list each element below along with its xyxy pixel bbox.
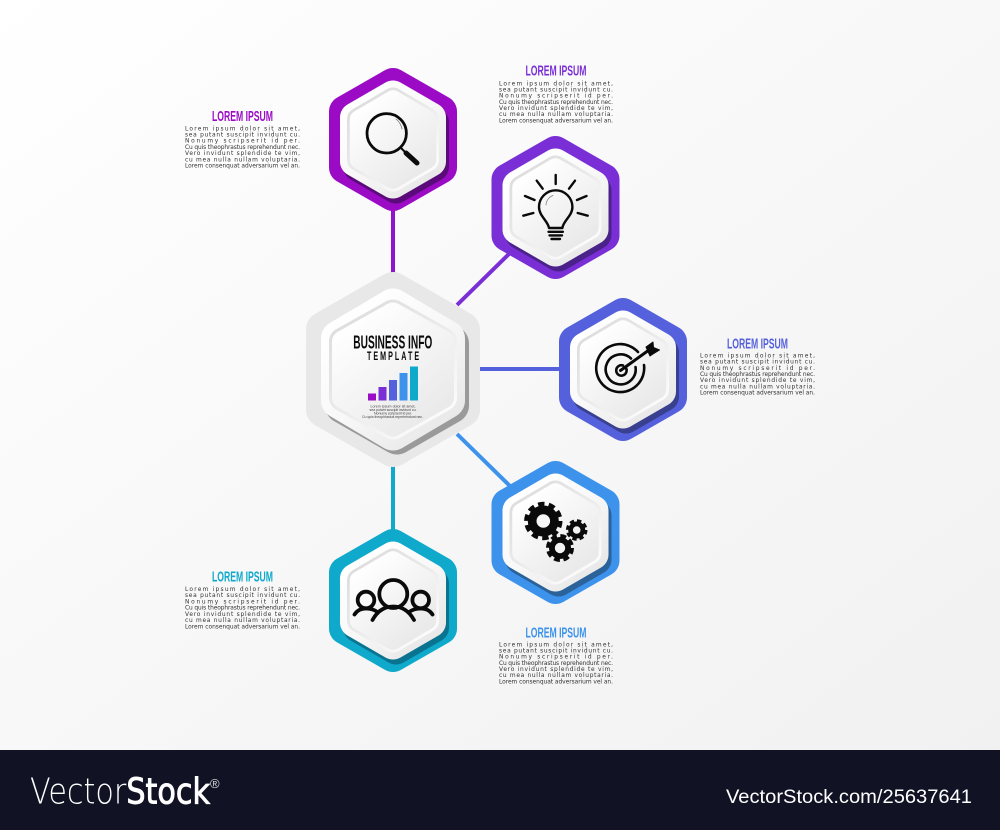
text block: search (185, 108, 300, 170)
text block: target: Nonumy scripserit id per. (700, 366, 815, 372)
icon: magnifying glass (367, 114, 417, 163)
text block: team (185, 569, 300, 630)
central caption (362, 405, 423, 419)
text block: gears: Nonumy scripserit id per. (499, 655, 613, 661)
text block: target (700, 335, 815, 397)
text block: idea: sea putant suscipit invidunt cu. (499, 88, 613, 94)
text block: idea: Vero invidunt splendide te vim, (499, 106, 613, 112)
connector: gears (457, 434, 512, 488)
panel: team hexagon (345, 545, 441, 656)
text block: gears: Lorem ipsum dolor sit amet, (499, 642, 613, 648)
text block: target: sea putant suscipit invidunt cu. (700, 360, 815, 366)
text block: gears: LOREM IPSUM (526, 624, 586, 641)
text block: search: LOREM IPSUM (212, 108, 273, 125)
text block: target: cu mea nulla nullam voluptaria. (700, 384, 815, 390)
panel: central hexagon (324, 290, 462, 449)
text block: team: sea putant suscipit invidunt cu. (185, 593, 300, 599)
text block: search: sea putant suscipit invidunt cu. (185, 132, 300, 138)
text block: target: Cu quis theophrastus reprehendunt nec. (700, 372, 815, 378)
footer logo: VectorStock (30, 772, 210, 813)
icon: target with arrow (596, 342, 660, 392)
connector: search (391, 205, 395, 275)
text block: gears: Lorem consenquat adversarium vel an. (499, 679, 613, 685)
panel: gears hexagon (508, 477, 604, 588)
text block: gears: Vero invidunt splendide te vim, (499, 667, 613, 673)
text block: search: Cu quis theophrastus reprehendunt nec. (185, 145, 300, 151)
text block: idea (499, 63, 613, 124)
central caption: Cu quis theophrastus reprehendunt nec. (362, 415, 423, 419)
text block: idea: Nonumy scripserit id per. (499, 94, 613, 100)
central caption: sea putant suscipit invidunt cu. (370, 408, 416, 412)
text block: team: Cu quis theophrastus reprehendunt nec. (185, 606, 300, 612)
registered mark: ® (210, 776, 220, 791)
icon: gears (526, 504, 586, 560)
text block: gears: Cu quis theophrastus reprehendunt nec. (499, 661, 613, 667)
bar chart (368, 366, 418, 400)
text block: team: Vero invidunt splendide te vim, (185, 612, 300, 618)
text block: team: Nonumy scripserit id per. (185, 599, 300, 605)
text block: idea: Lorem ipsum dolor sit amet, (499, 81, 613, 87)
text block: target: LOREM IPSUM (727, 335, 788, 352)
connector: team (391, 465, 395, 533)
text block: idea: cu mea nulla nullam voluptaria. (499, 112, 613, 118)
text block: team: cu mea nulla nullam voluptaria. (185, 618, 300, 624)
text block: idea: Cu quis theophrastus reprehendunt nec. (499, 100, 613, 106)
footer id: VectorStock.com/25637641 (726, 787, 972, 808)
text block: target: Lorem consenquat adversarium vel an. (700, 391, 815, 397)
central caption: Nonumy scripserit id per. (374, 412, 412, 416)
connector: target (478, 367, 562, 371)
icon: team (354, 580, 432, 620)
connector: idea (457, 251, 512, 305)
text block: search: Vero invidunt splendide te vim, (185, 151, 300, 157)
central caption: Lorem ipsum dolor sit amet, (370, 405, 416, 409)
text block: gears (499, 624, 613, 685)
central subtitle: TEMPLATE (367, 350, 419, 364)
text block: idea: Lorem consenquat adversarium vel an. (499, 118, 613, 124)
footer band (0, 750, 1000, 830)
text block: target: Lorem ipsum dolor sit amet, (700, 353, 815, 359)
panel: idea hexagon (508, 152, 604, 263)
text block: team: LOREM IPSUM (212, 569, 273, 586)
text block: team: Lorem ipsum dolor sit amet, (185, 587, 300, 593)
icon: light bulb (523, 175, 588, 239)
central title: BUSINESS INFO (353, 332, 432, 352)
panel: search hexagon (345, 84, 441, 195)
text block: team: Lorem consenquat adversarium vel an. (185, 624, 300, 630)
panel: target hexagon (575, 314, 671, 425)
text block: search: Lorem ipsum dolor sit amet, (185, 126, 300, 132)
text block: target: Vero invidunt splendide te vim, (700, 378, 815, 384)
text block: search: Nonumy scripserit id per. (185, 139, 300, 145)
text block: search: Lorem consenquat adversarium vel an. (185, 164, 300, 170)
text block: search: cu mea nulla nullam voluptaria. (185, 157, 300, 163)
text block: gears: cu mea nulla nullam voluptaria. (499, 673, 613, 679)
text block: idea: LOREM IPSUM (526, 63, 586, 80)
text block: gears: sea putant suscipit invidunt cu. (499, 648, 613, 654)
